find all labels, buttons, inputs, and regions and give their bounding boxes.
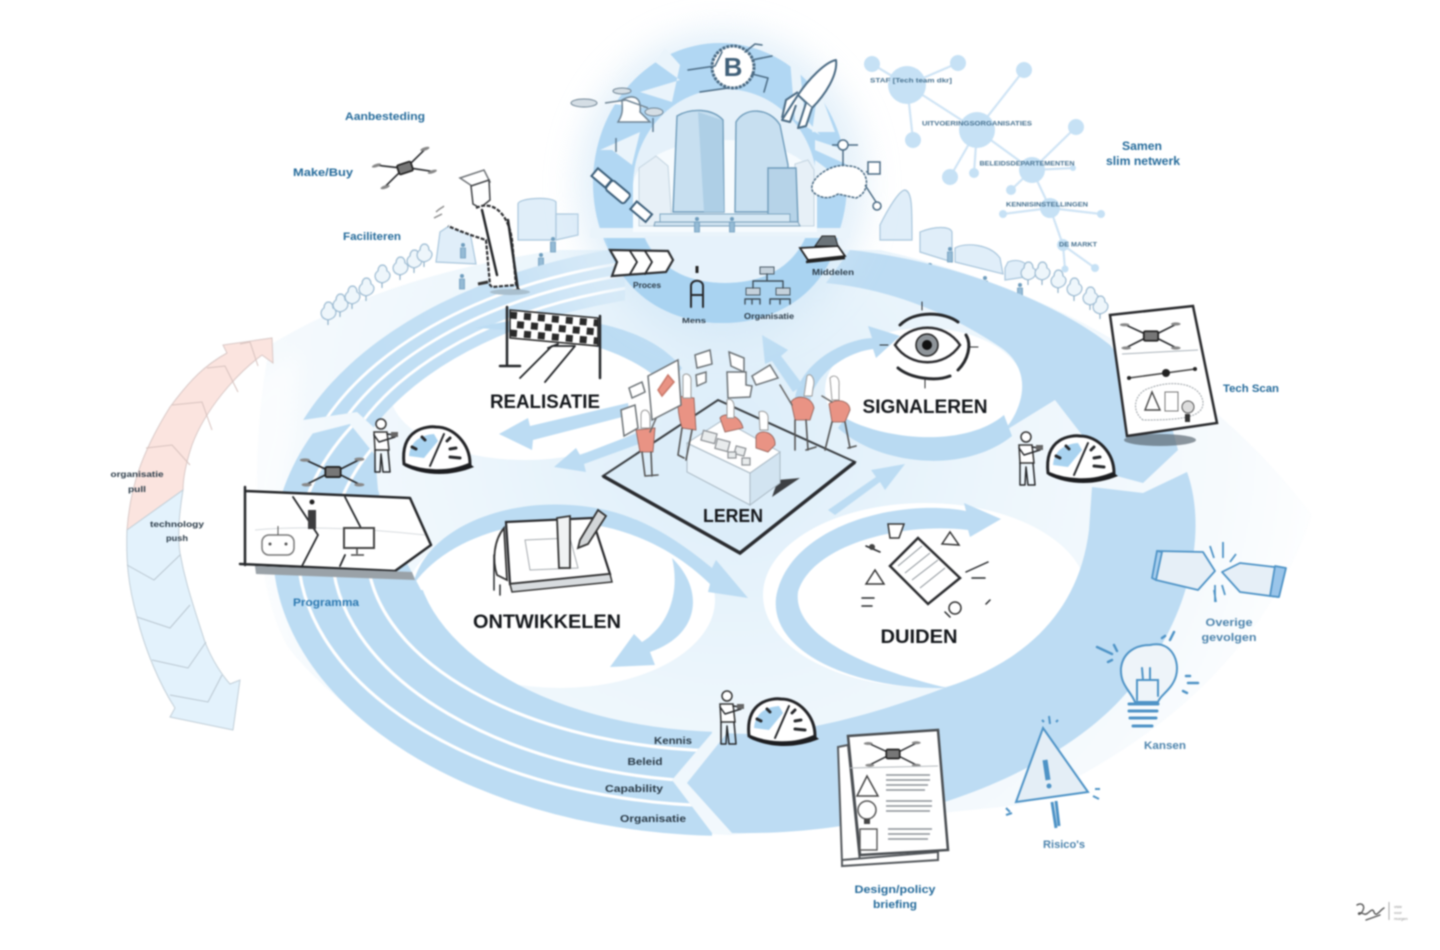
icon: light bulb <box>1097 632 1198 752</box>
icon: warning triangle: Risico's <box>1043 839 1085 851</box>
icon: speedometer bottom <box>749 699 819 746</box>
arrow: technology push <box>127 490 240 730</box>
lower-left capability tracks <box>274 424 713 836</box>
panel: Samen slim netwerk: STAF [Tech team dkr] <box>870 78 952 84</box>
panel: Programma chevron board <box>240 487 432 609</box>
icon: drone over programme <box>300 458 364 486</box>
heading: SIGNALEREN: SIGNALEREN <box>862 397 988 418</box>
icon: colliding arrows <box>1152 542 1286 644</box>
inner plaza <box>644 236 806 283</box>
panel: Samen slim netwerk: Samen <box>1122 141 1162 153</box>
icon: quadcopter <box>571 88 663 152</box>
icon: speedometer left <box>404 427 474 474</box>
labels: sourcing <box>293 111 425 243</box>
labels: sourcing: Faciliteren <box>343 231 401 243</box>
arrow: centre up to top ring <box>762 335 803 392</box>
logo <box>1357 902 1408 921</box>
panel: Design/policy briefing document <box>838 730 948 911</box>
panel: top ring with city <box>571 30 881 340</box>
arrow: organisatie pull: pull <box>128 484 146 494</box>
icon: brain <box>812 140 881 210</box>
presentation board and sticky notes <box>621 350 778 436</box>
upper-left tracks <box>303 251 625 428</box>
icon: satellite <box>591 168 652 222</box>
track labels: Organisatie <box>620 813 686 825</box>
left wedge whitening <box>185 350 300 680</box>
panel: Samen slim netwerk <box>864 55 1181 272</box>
ring <box>593 43 847 323</box>
icon: briefing with icons <box>862 524 990 617</box>
icon: Proces chevrons <box>610 250 673 290</box>
icon: Middelen ship <box>800 236 854 277</box>
heading: DUIDEN: DUIDEN <box>880 627 958 648</box>
icon: rocket <box>782 60 836 128</box>
panel: Tech Scan document <box>1110 306 1279 446</box>
panel: LEREN platform <box>603 350 856 553</box>
ring chevrons <box>590 48 850 238</box>
icon: checkered finish banner <box>500 307 600 382</box>
panel: Samen slim netwerk: UITVOERINGSORGANISATIES <box>922 120 1033 128</box>
city towers <box>639 110 814 232</box>
arrow: Signaleren inner swoosh <box>795 326 1012 461</box>
panel: Samen slim netwerk: KENNISINSTELLINGEN <box>1006 202 1088 208</box>
arrow: centre to Duiden <box>828 464 905 515</box>
icon: monitor person bottom <box>720 691 744 744</box>
arrow: organisatie pull: organisatie <box>110 469 164 479</box>
panel: lower ring with Proces, Mens, Organisatie, Middelen <box>606 236 854 325</box>
logo: visie <box>1394 904 1403 909</box>
icon: monitor person left <box>374 419 398 472</box>
icon: light bulb: Kansen <box>1144 740 1186 752</box>
panel: Design/policy briefing document: Design/policy <box>854 884 936 896</box>
track labels: Capability <box>605 783 663 795</box>
track labels <box>605 735 692 825</box>
skyline right <box>880 190 1108 319</box>
icon: speedometer right <box>1048 436 1118 483</box>
icon: colliding arrows: Overige <box>1206 617 1252 629</box>
team members <box>636 374 856 476</box>
heading: REALISATIE: REALISATIE <box>490 392 600 413</box>
background: pale swirl field <box>257 250 1312 835</box>
arrow: Ontwikkelen swoosh <box>413 504 748 667</box>
icon: Middelen ship: Middelen <box>812 268 854 277</box>
icon: Proces chevrons: Proces <box>633 281 662 290</box>
icon: bitcoin <box>688 44 772 92</box>
arrow: technology push: push <box>166 533 188 543</box>
arrow: Realisatie swoosh <box>475 319 682 472</box>
arrow: organisatie pull <box>110 338 273 530</box>
icon: Organisatie chart: Organisatie <box>744 312 795 321</box>
icon: monitor person right <box>1019 432 1043 485</box>
heading: ONTWIKKELEN: ONTWIKKELEN <box>473 612 621 633</box>
main band upper right <box>826 250 1178 483</box>
panel: Design/policy briefing document: briefing <box>873 899 917 911</box>
icon: Organisatie chart <box>744 267 795 321</box>
panel: Samen slim netwerk: BELEIDSDEPARTEMENTEN <box>980 160 1075 168</box>
arrow: technology push: technology <box>150 519 204 529</box>
ring lower arc <box>606 238 838 323</box>
icon: flying drone top left <box>371 146 437 191</box>
logo: morgen <box>1394 916 1408 921</box>
labels: sourcing: Aanbesteding <box>345 111 425 123</box>
icon: design sketch on tablet <box>494 510 612 595</box>
track labels: Beleid <box>628 756 662 768</box>
white lobes <box>390 324 1087 688</box>
panel: Samen slim netwerk: DE MARKT <box>1059 242 1097 248</box>
icon: bitcoin: B <box>724 52 742 82</box>
table with paperwork <box>687 420 800 505</box>
icon: pilot with cap <box>434 170 530 295</box>
panel: Tech Scan document: Tech Scan <box>1223 383 1279 395</box>
track labels: Kennis <box>654 735 692 747</box>
logo: voor <box>1394 910 1402 915</box>
icon: colliding arrows: gevolgen <box>1202 632 1257 644</box>
icon: Mens figure: Mens <box>682 316 706 325</box>
labels: sourcing: Make/Buy <box>293 167 354 179</box>
main band lower right <box>687 472 1196 833</box>
icon: warning triangle <box>1006 716 1100 851</box>
label LEREN: LEREN <box>703 505 763 526</box>
arrow: Duiden swoosh <box>776 503 1001 688</box>
icon: eye <box>880 302 978 388</box>
skyline left <box>321 198 578 325</box>
panel: Programma chevron board: Programma <box>293 597 360 609</box>
panel: Samen slim netwerk: slim netwerk <box>1106 156 1181 168</box>
icon: Mens figure <box>682 266 706 325</box>
